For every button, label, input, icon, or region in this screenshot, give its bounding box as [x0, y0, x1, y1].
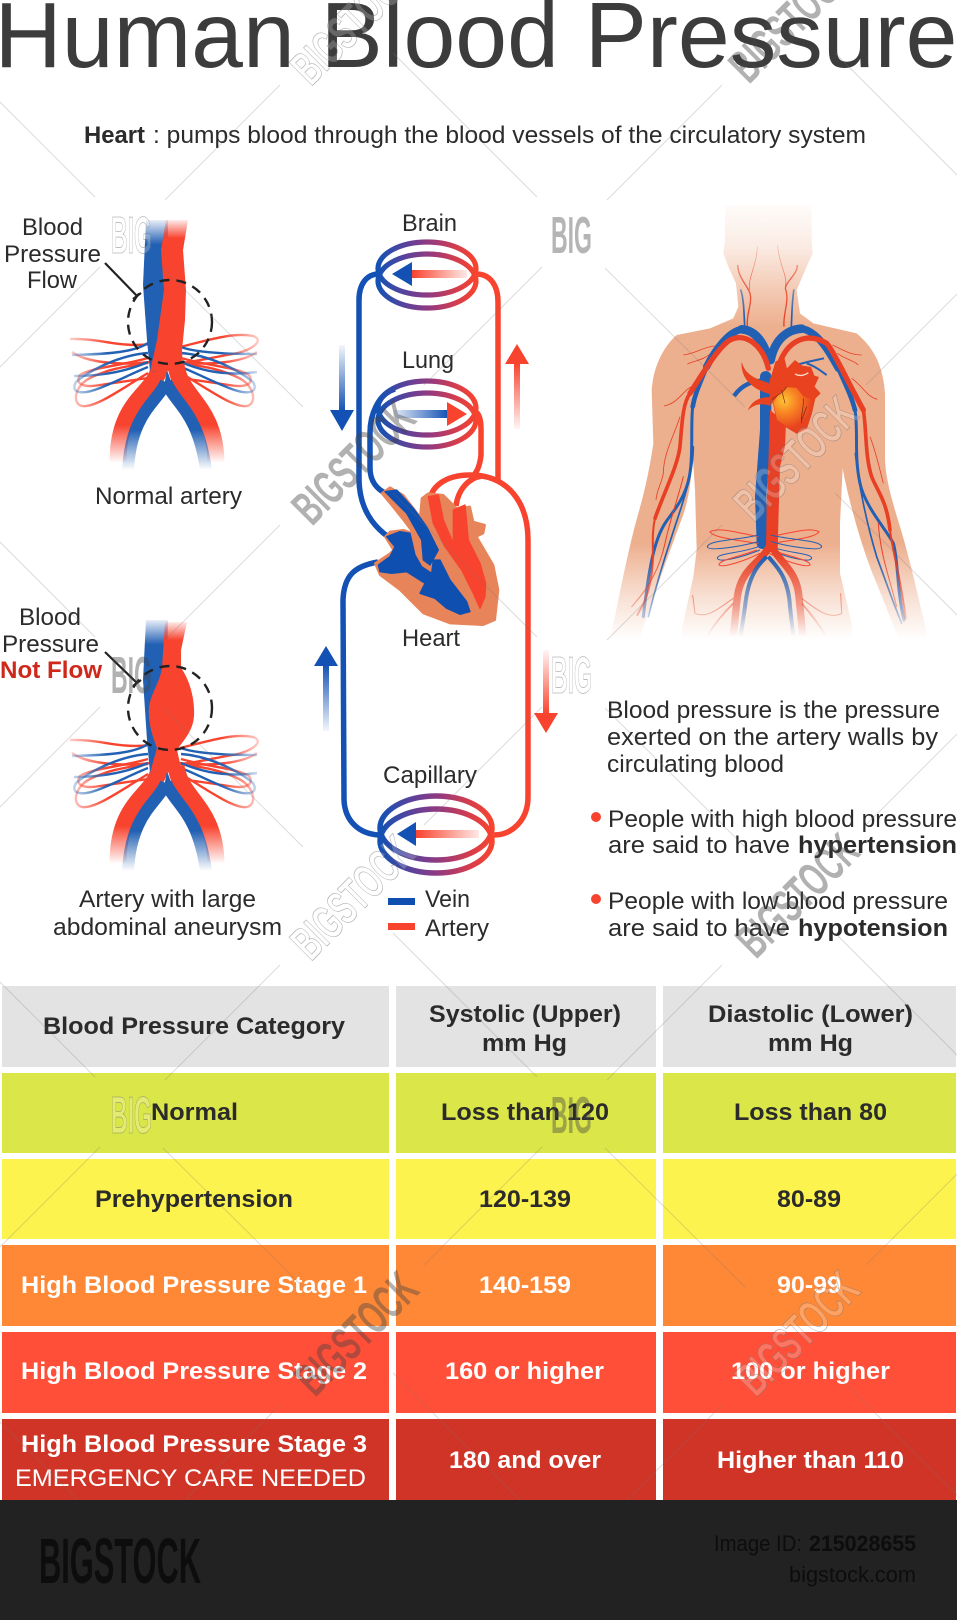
neck and head vessels [738, 245, 797, 327]
text block: blood pressure definition [607, 697, 940, 778]
label: blood pressure not flow: Not Flow [0, 657, 102, 684]
vessels: arteries [430, 274, 528, 835]
row: normal: Normal [151, 1099, 238, 1126]
label: blood pressure flow [4, 214, 101, 294]
panel: normal artery [4, 214, 258, 510]
shoulder and arm branches [656, 345, 883, 500]
table: blood pressure categories [2, 986, 956, 1500]
infographic canvas: BIG [551, 647, 592, 705]
caption: normal artery: Normal artery [95, 483, 242, 510]
aneurysm illustration [70, 620, 258, 871]
legend: Artery [425, 915, 489, 942]
row: stage 1: 90-99 [777, 1272, 841, 1299]
bullet: hypertension: hypertension [798, 832, 957, 859]
row: stage 2: 100 or higher [731, 1358, 890, 1385]
panel: abdominal aneurysm [0, 604, 282, 941]
body silhouette [610, 205, 928, 652]
row: normal [2, 1073, 956, 1153]
artery illustration [70, 220, 258, 470]
text block: blood pressure definition: exerted on the artery walls by [607, 724, 938, 751]
row: stage 2 [2, 1332, 956, 1413]
blue arches [643, 329, 904, 623]
table header row: mm Hg [768, 1030, 853, 1057]
infographic canvas: BIG [551, 207, 592, 265]
row: normal: Loss than 120 [441, 1099, 609, 1126]
row: stage 3: EMERGENCY CARE NEEDED [15, 1465, 366, 1492]
row: prehypertension [2, 1159, 956, 1239]
aorta [766, 410, 786, 550]
row: stage 1: 140-159 [479, 1272, 571, 1299]
node: heart: Heart [402, 625, 460, 652]
watermark: BIG marks: BIG [111, 647, 152, 705]
row: prehypertension: 120-139 [479, 1186, 571, 1213]
row: stage 1: High Blood Pressure Stage 1 [21, 1272, 367, 1299]
arrow: red up [505, 344, 529, 429]
footer image id [714, 1531, 916, 1587]
bullet: hypertension [591, 806, 957, 859]
label: blood pressure flow: Blood [22, 214, 83, 241]
bullet: hypertension: are said to have [608, 832, 790, 859]
watermark: BIG marks: BIG [111, 1087, 152, 1145]
label: blood pressure flow: Pressure [4, 241, 101, 268]
label: blood pressure not flow: Pressure [2, 631, 99, 658]
footer bar: BIGSTOCK [39, 1525, 201, 1597]
node: brain: Brain [402, 210, 457, 237]
arrow: red down [534, 650, 558, 733]
table header row: mm Hg [482, 1030, 567, 1057]
red arches [632, 338, 906, 618]
row: prehypertension: 80-89 [777, 1186, 841, 1213]
panel: human body circulatory illustration [610, 205, 928, 652]
label: blood pressure flow: Flow [27, 267, 78, 294]
row: stage 3 [2, 1419, 956, 1500]
bullet: hypotension: People with low blood pressure [608, 888, 948, 915]
label: blood pressure not flow [0, 604, 102, 684]
watermark: BIGSTOCK marks: BIGSTOCK [281, 826, 425, 970]
bullet: hypotension: hypotension [798, 915, 948, 942]
row: stage 2: 160 or higher [445, 1358, 604, 1385]
footer image id: Image ID: [714, 1531, 802, 1556]
bullet: hypotension [591, 888, 948, 942]
row: prehypertension: Prehypertension [95, 1186, 293, 1213]
node: brain [378, 210, 476, 308]
node: lung: Lung [402, 347, 454, 374]
table header row [2, 986, 956, 1067]
row: stage 3: 180 and over [449, 1447, 601, 1474]
subtitle: heart definition: Heart [84, 122, 145, 149]
node: heart [375, 487, 498, 652]
subtitle: heart definition: : pumps blood through the blood vessels of the circulatory system [153, 122, 866, 149]
footer image id: bigstock.com [789, 1562, 916, 1587]
legend [388, 886, 489, 942]
pointer and dashed circle [105, 652, 212, 750]
bullet: hypertension: People with high blood pressure [608, 806, 957, 833]
text block: blood pressure definition: circulating blood [607, 751, 784, 778]
row: stage 2: High Blood Pressure Stage 2 [21, 1358, 367, 1385]
arrow: blue up [314, 646, 338, 731]
watermark: BIGSTOCK marks: BIGSTOCK [726, 824, 870, 968]
caption: aneurysm [53, 886, 282, 941]
pelvic capillaries [707, 530, 822, 566]
label: blood pressure not flow: Blood [19, 604, 81, 631]
row: stage 1 [2, 1245, 956, 1326]
table header row: Diastolic (Lower) [708, 1001, 913, 1028]
caption: aneurysm: Artery with large [79, 886, 256, 913]
legend: Vein [425, 886, 470, 913]
watermark: BIG marks: BIG [111, 207, 152, 265]
row: stage 3: High Blood Pressure Stage 3 [21, 1431, 367, 1458]
infographic canvas: BIG [551, 1087, 592, 1145]
vessels: veins [343, 274, 395, 835]
watermark: BIGSTOCK marks: BIGSTOCK [285, 1262, 429, 1406]
footer bar [0, 1500, 957, 1620]
watermark: BIGSTOCK marks: BIGSTOCK [724, 387, 868, 531]
iliac vessels [693, 545, 842, 652]
bullet: hypotension: are said to have [608, 915, 790, 942]
caption: aneurysm: abdominal aneurysm [53, 914, 282, 941]
arrow: blue down [330, 345, 354, 431]
footer image id: 215028655 [809, 1531, 916, 1556]
pointer and dashed circle [105, 263, 212, 364]
node: capillary: Capillary [383, 762, 477, 789]
table header row: Blood Pressure Category [43, 1013, 346, 1040]
heart with branches [734, 358, 827, 433]
text block: blood pressure definition: Blood pressure is the pressure [607, 697, 940, 724]
node: lung [378, 347, 476, 447]
row: stage 3: Higher than 110 [717, 1447, 904, 1474]
node: capillary [380, 762, 492, 873]
watermark: BIGSTOCK marks: BIGSTOCK [282, 391, 426, 535]
row: normal: Loss than 80 [734, 1099, 887, 1126]
watermark: BIGSTOCK marks [281, 0, 870, 1406]
watermark: BIGSTOCK marks: BIGSTOCK [726, 1262, 870, 1406]
panel: circulation diagram [314, 210, 558, 942]
watermark: BIG marks [111, 207, 592, 1145]
table header row: Systolic (Upper) [429, 1001, 621, 1028]
